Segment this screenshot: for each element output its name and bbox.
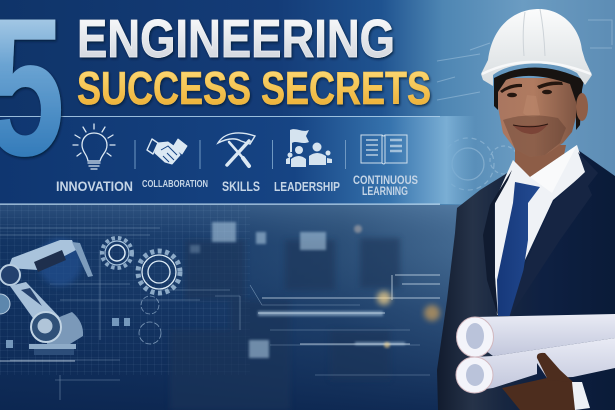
engineer figure (437, 9, 615, 410)
shirt (495, 145, 586, 315)
hard hat (481, 9, 592, 86)
icon: continuous learning open book (361, 135, 407, 164)
icon: leadership flag and team (286, 129, 332, 167)
divider (200, 140, 201, 169)
label: leadership: LEADERSHIP (274, 179, 340, 194)
collar highlight (530, 145, 577, 193)
beard shadow (503, 115, 566, 157)
upper right blueprint backdrop (437, 20, 612, 190)
icon: skills crossed hammer and screwdriver (218, 133, 255, 166)
nose (523, 95, 540, 117)
divider (272, 140, 273, 169)
label: continuous learning: CONTINUOUS (353, 173, 418, 187)
suit jacket (437, 150, 615, 410)
title line 2: SUCCESS SECRETS (77, 62, 431, 114)
label: skills: SKILLS (222, 178, 260, 194)
divider (345, 140, 346, 169)
light glows (354, 225, 440, 348)
hand and cuff (502, 353, 590, 410)
right lapel (509, 152, 598, 318)
ear (576, 93, 588, 121)
divider (134, 140, 136, 169)
blueprint rolls (456, 314, 615, 393)
background: lower technology scene (0, 205, 615, 410)
left lapel (483, 170, 512, 316)
eyebrows and eyes (500, 82, 563, 97)
mouth (513, 124, 548, 134)
hair (494, 67, 584, 130)
blueprint gear (442, 138, 518, 190)
data tiles (6, 318, 130, 348)
title line 1: ENGINEERING (77, 9, 395, 69)
tie (497, 182, 540, 316)
head (497, 78, 578, 157)
panel: icon band (0, 116, 475, 205)
label: collaboration: COLLABORATION (142, 179, 208, 190)
robot arm (0, 238, 93, 355)
gears (102, 238, 180, 344)
icon: collaboration handshake (147, 139, 187, 164)
label: continuous learning: LEARNING (362, 184, 408, 198)
neck (515, 145, 566, 185)
background: upper blue (0, 0, 615, 210)
label: innovation: INNOVATION (56, 178, 133, 194)
icon: innovation light bulb (73, 124, 115, 169)
